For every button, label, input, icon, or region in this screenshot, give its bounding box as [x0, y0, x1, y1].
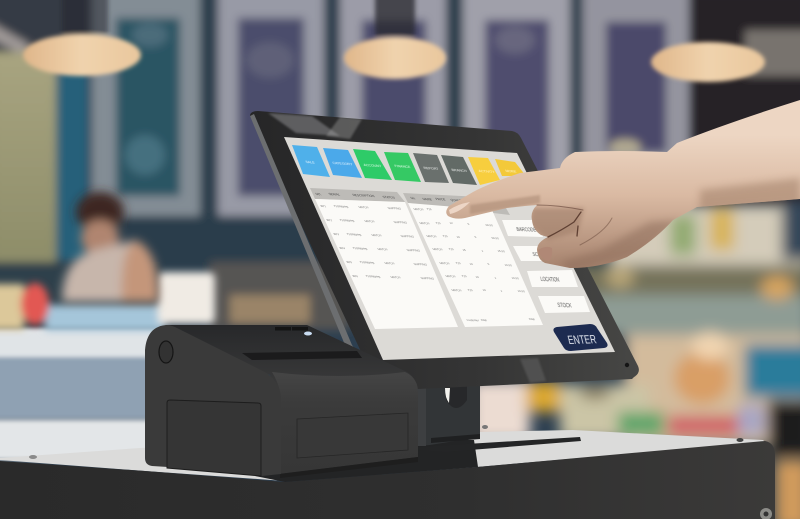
- left table body: TSShipping: [333, 204, 349, 209]
- right table body: MATCH: [419, 221, 430, 225]
- left table body: MATCH: [358, 205, 369, 209]
- right table body: 10: [475, 275, 480, 279]
- printer top: [165, 325, 417, 400]
- left table body: MATCH: [390, 275, 401, 279]
- right table body: T20: [461, 274, 468, 278]
- right table body: MATCH: [445, 274, 456, 278]
- bezel edge highlight: [250, 114, 385, 392]
- right table header: NAME: [422, 197, 433, 201]
- stand base: [418, 437, 581, 452]
- right table body: T20: [448, 247, 455, 251]
- shadow under printer and stand: [255, 440, 478, 482]
- blurred shelf colours: [470, 200, 800, 519]
- left table body: SHIPPING: [387, 206, 402, 211]
- left table body: TSShipping: [359, 260, 375, 265]
- button: more: MORE: [505, 169, 518, 174]
- right table body: Total: [528, 317, 536, 321]
- left table body: MATCH: [371, 233, 382, 237]
- right table body: T20: [435, 221, 442, 225]
- right table body: 1: [481, 249, 484, 253]
- button: activity: ACTIVITY: [478, 169, 496, 174]
- right table body: 10: [482, 288, 487, 292]
- chalkboard frames: [92, 0, 200, 216]
- touch screen: [284, 137, 615, 360]
- right table body: 15: [462, 248, 467, 252]
- button: account: [353, 149, 392, 180]
- right table body: 15.00: [497, 249, 506, 253]
- blurred left counter: [0, 328, 160, 460]
- pendant lamps: [23, 0, 765, 82]
- left table body: SHIPPING: [400, 234, 415, 239]
- button: location: LOCATION: [540, 276, 561, 284]
- printer front recess: [297, 413, 408, 458]
- right table body: MATCH: [432, 247, 443, 251]
- right table header: No.: [410, 196, 416, 200]
- counter screws: [29, 425, 772, 519]
- left table body: TSShipping: [339, 218, 355, 223]
- left table body: TSShipping: [365, 274, 381, 279]
- button: scan: SCAN: [532, 252, 545, 259]
- counter top surface: [0, 430, 765, 481]
- left table body: BP6: [352, 274, 359, 278]
- left table body: BP3: [333, 232, 340, 236]
- right table body: 5: [474, 235, 477, 239]
- left table body: MATCH: [377, 247, 388, 251]
- right table body: T20: [455, 261, 462, 265]
- right table body: [408, 203, 543, 327]
- printer paper slot: [242, 351, 362, 360]
- button: barcode: BARCODE: [516, 227, 538, 234]
- printer front: [272, 372, 418, 474]
- left table body: BP4: [339, 246, 346, 250]
- fingertip highlight: [449, 202, 470, 214]
- left table body: TSShipping: [352, 246, 368, 251]
- thumbnail: [538, 247, 552, 261]
- printer top vents: [275, 327, 308, 330]
- left table header: [310, 188, 405, 202]
- right table body: 10.00: [504, 263, 513, 267]
- left table body: SHIPPING: [413, 262, 428, 267]
- blurred counter items: [0, 272, 215, 331]
- right table body: 10.00: [517, 289, 526, 293]
- bezel: [250, 111, 639, 392]
- button: category: CATEGORY: [332, 161, 354, 166]
- left table body: MATCH: [364, 219, 375, 223]
- right table body: MATCH: [451, 288, 462, 292]
- button: report: [413, 153, 449, 183]
- left table body: [315, 199, 458, 329]
- side buttons: [502, 220, 608, 351]
- left table body: BP1: [320, 204, 327, 208]
- left table body: BP2: [326, 218, 333, 222]
- right table body: 1: [500, 289, 503, 293]
- right table body: 5: [487, 262, 490, 266]
- right table body: MATCH: [439, 261, 450, 265]
- printer status light: [304, 332, 312, 336]
- right table body: 60.00: [485, 223, 494, 227]
- monitor: [250, 111, 639, 392]
- left table body: SHIPPING: [406, 248, 421, 253]
- right table body: 10: [456, 235, 461, 239]
- right table header: [403, 193, 510, 215]
- right table body: T20: [467, 288, 474, 292]
- left table header: SERIAL: [328, 192, 341, 197]
- left table body: BP5: [346, 260, 353, 264]
- right table: [403, 193, 543, 327]
- button: more: [495, 159, 526, 176]
- button: finance: [384, 152, 421, 182]
- right table body: 10: [469, 262, 474, 266]
- button: branch: [441, 155, 477, 185]
- button: branch: BRANCH: [451, 168, 468, 173]
- button: account: ACCOUNT: [363, 163, 383, 168]
- right table body: T15: [426, 207, 433, 211]
- left table body: SHIPPING: [420, 276, 435, 281]
- right table body: Total: [480, 318, 488, 322]
- right table body: 5: [467, 222, 470, 226]
- right table body: MATCH: [426, 234, 437, 238]
- left table body: SHIPPING: [393, 220, 408, 225]
- left table header: STATUS: [382, 195, 396, 200]
- counter front panel: [0, 441, 775, 519]
- left table header: NO.: [315, 192, 322, 196]
- button: enter: ENTER: [567, 334, 598, 347]
- right table body: 12: [449, 221, 454, 225]
- button: stock: STOCK: [557, 302, 573, 310]
- left table body: MATCH: [384, 261, 395, 265]
- right table body: 50.00: [491, 236, 500, 240]
- button: category: [323, 148, 362, 178]
- right table header: PRICE: [435, 197, 447, 201]
- left table body: TSShipping: [346, 232, 362, 237]
- right table body: Customer: [466, 318, 480, 322]
- right table body: T20: [442, 234, 449, 238]
- printer side: [145, 325, 281, 476]
- hand pointing at the screen: [446, 100, 800, 272]
- button: sale: SALE: [305, 160, 316, 165]
- menu buttons: [292, 145, 526, 185]
- printer side door: [167, 400, 261, 476]
- bezel glare: [268, 113, 340, 136]
- left table header: DESCRIPTION: [352, 193, 376, 198]
- blurred person: [62, 192, 158, 302]
- right table body: 1: [494, 276, 497, 280]
- button: activity: [468, 157, 500, 185]
- knuckle fold lines: [537, 205, 612, 245]
- right table header: QUANTITY: [450, 198, 468, 203]
- button: sale: [292, 145, 330, 177]
- receipt printer: [145, 325, 418, 478]
- right table body: MATCH: [413, 207, 424, 211]
- counter: [0, 425, 775, 519]
- right table body: 10.00: [511, 276, 520, 280]
- button: report: REPORT: [423, 166, 440, 171]
- monitor stand: [418, 385, 581, 452]
- printer round button: [159, 341, 173, 363]
- button: finance: FINANCE: [394, 164, 412, 169]
- hand shading: [470, 178, 800, 272]
- left table: [310, 188, 458, 329]
